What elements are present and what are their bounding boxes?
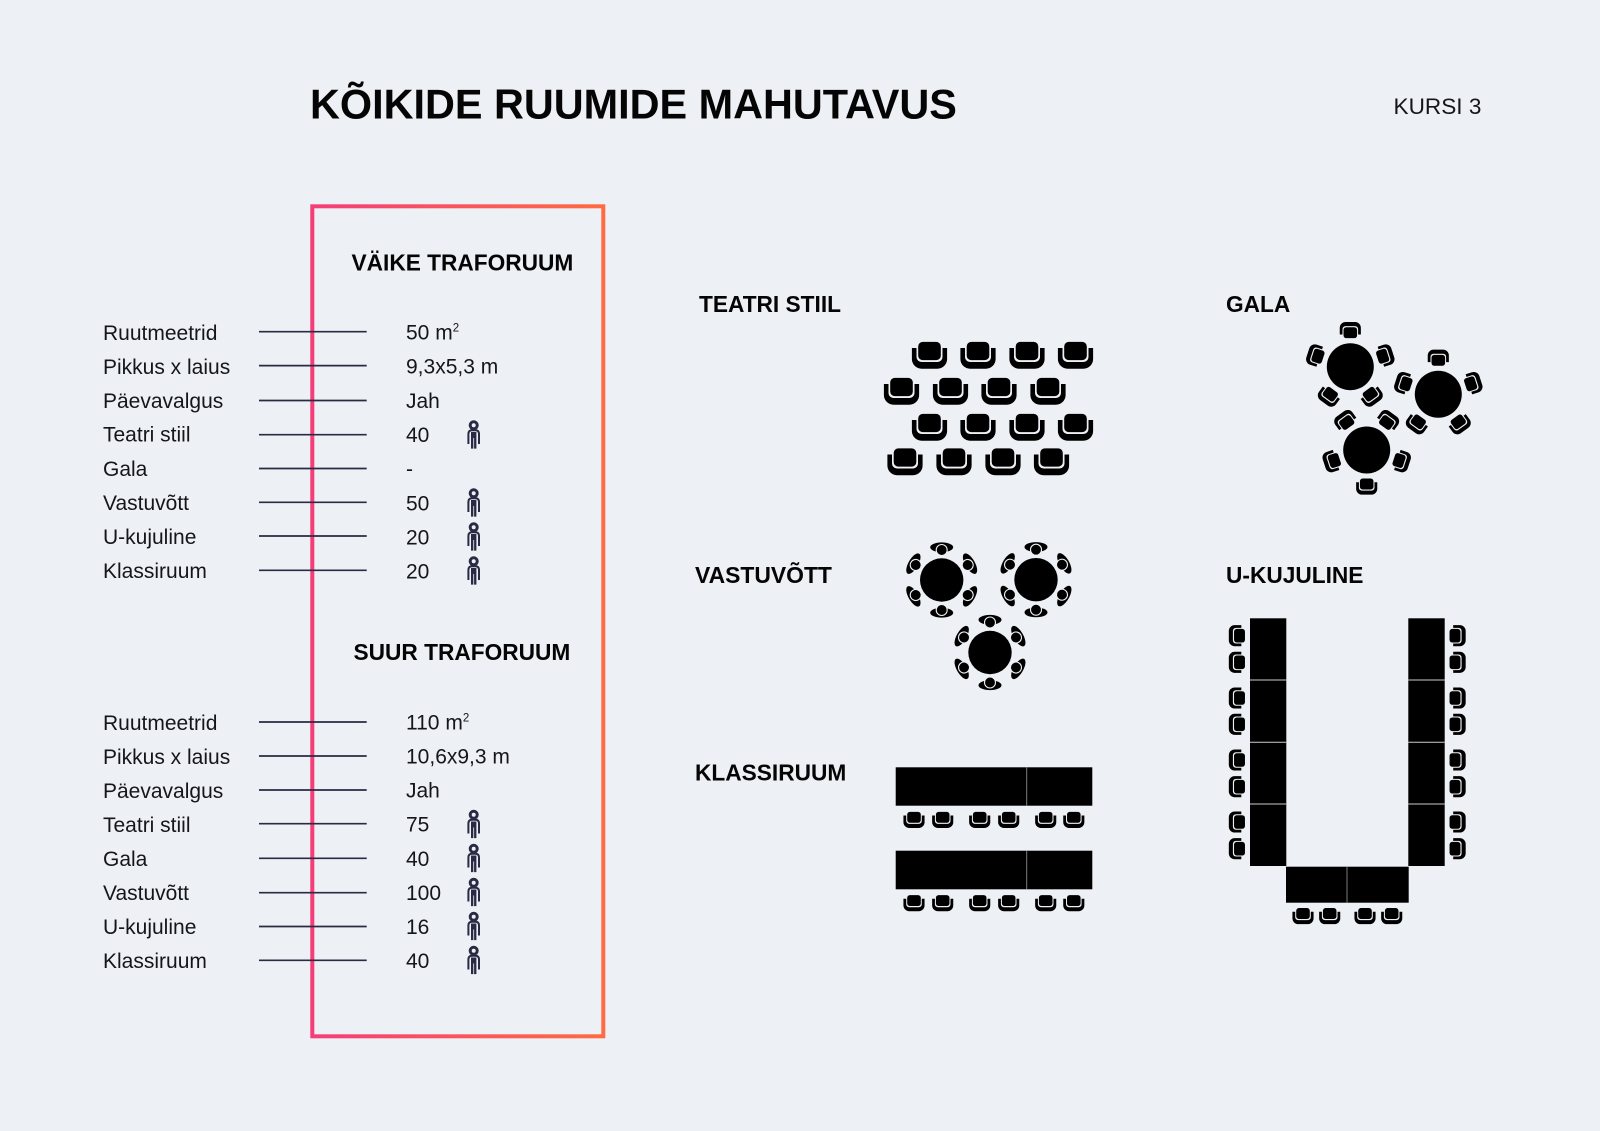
table: small room capacities: Klassiruum	[103, 560, 207, 583]
table: large room capacities: 10,6x9,3 m	[406, 746, 510, 768]
table: small room capacities: Pikkus x laius	[103, 356, 230, 379]
table: large room capacities: Gala	[103, 848, 148, 871]
table: small room capacities	[103, 322, 498, 585]
table: large room capacities: 2	[463, 712, 469, 724]
heading: gala: GALA	[1226, 291, 1290, 317]
table: large room capacities: Päevavalgus	[103, 780, 223, 803]
diagram: reception standing tables	[903, 542, 1074, 690]
table: large room capacities: 40	[406, 848, 429, 871]
table: large room capacities: 16	[406, 916, 429, 939]
table: large room capacities: Jah	[406, 780, 440, 802]
heading: classroom: KLASSIRUUM	[695, 759, 846, 785]
table: large room capacities: 110 m	[406, 712, 463, 734]
table: large room capacities: Vastuvõtt	[103, 882, 189, 905]
table: small room capacities: -	[406, 458, 413, 481]
title: KÕIKIDE RUUMIDE MAHUTAVUS	[310, 82, 957, 128]
table: small room capacities: 20	[406, 560, 429, 584]
table: small room capacities: 9,3x5,3 m	[406, 356, 498, 378]
table: small room capacities: Jah	[406, 390, 440, 413]
table: large room capacities: 100	[406, 882, 441, 905]
course label: KURSI 3	[1394, 94, 1481, 119]
panel: room capacity frame	[312, 206, 603, 1036]
table: large room capacities: U-kujuline	[103, 916, 196, 939]
table: large room capacities: Klassiruum	[103, 950, 207, 973]
diagram: theatre style seating	[884, 342, 1093, 475]
heading: small room: VÄIKE TRAFORUUM	[352, 250, 573, 276]
table: large room capacities	[103, 712, 510, 974]
table: small room capacities: Teatri stiil	[103, 424, 191, 446]
table: large room capacities: 75	[406, 814, 429, 836]
table: large room capacities: Ruutmeetrid	[103, 712, 217, 735]
table: large room capacities: Teatri stiil	[103, 814, 191, 837]
table: large room capacities: Pikkus x laius	[103, 746, 230, 769]
diagram: classroom tables and chairs	[896, 767, 1092, 911]
table: small room capacities: Gala	[103, 458, 148, 481]
table: small room capacities: 20	[406, 526, 429, 550]
table: small room capacities: 50 m	[406, 322, 453, 344]
table: small room capacities: Päevavalgus	[103, 390, 223, 413]
diagram: gala round tables	[1305, 322, 1484, 495]
table: small room capacities: U-kujuline	[103, 526, 196, 549]
heading: theatre style: TEATRI STIIL	[699, 291, 841, 317]
heading: U-shape: U-KUJULINE	[1226, 562, 1363, 588]
table: small room capacities: 40	[406, 424, 429, 447]
diagram: U-shaped tables and chairs	[1229, 618, 1466, 924]
table: large room capacities: 40	[406, 950, 429, 973]
heading: large room: SUUR TRAFORUUM	[354, 639, 570, 665]
table: small room capacities: Ruutmeetrid	[103, 322, 217, 345]
heading: reception: VASTUVÕTT	[695, 562, 832, 588]
table: small room capacities: 50	[406, 492, 429, 516]
table: small room capacities: Vastuvõtt	[103, 492, 189, 515]
table: small room capacities: 2	[453, 322, 459, 334]
